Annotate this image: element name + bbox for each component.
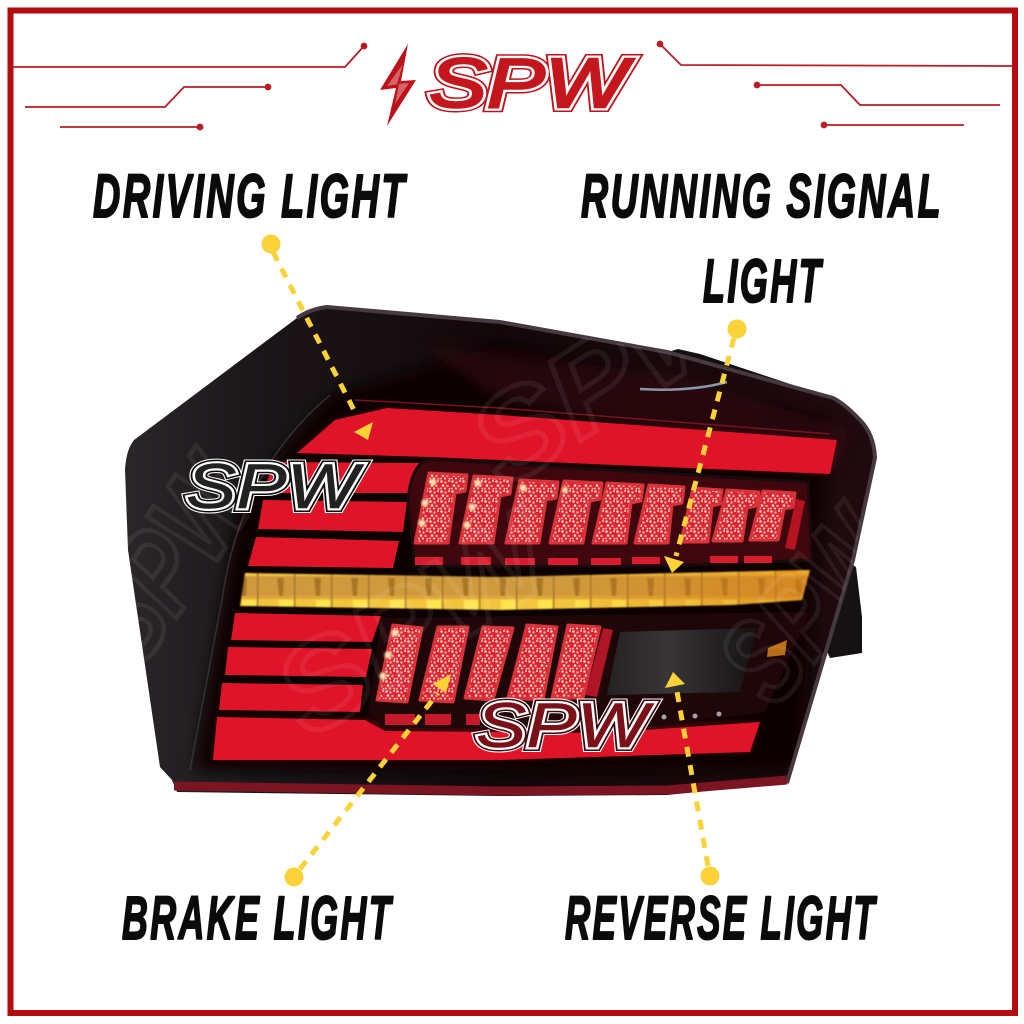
circuit lines: left bbox=[13, 43, 367, 130]
arrow: running signal light bbox=[664, 320, 746, 573]
thin upper red line bbox=[355, 400, 830, 434]
watermark logo: centre: SPW bbox=[476, 691, 655, 761]
label: running signal light: LIGHT bbox=[703, 247, 823, 315]
running signal amber bar bbox=[240, 570, 810, 610]
faint watermarks: SPW bbox=[251, 481, 584, 762]
thin brake segment bbox=[585, 628, 613, 697]
connector housing at the rear bbox=[822, 560, 862, 658]
logo wordmark SPW: SPW bbox=[429, 44, 634, 122]
driving light bars: upper left bbox=[248, 462, 420, 568]
upper LED modules bbox=[415, 473, 795, 543]
ribbed upper rim bbox=[297, 307, 875, 783]
driving light bars: lower left bbox=[213, 613, 760, 760]
brand logo bbox=[380, 44, 634, 126]
logo wordmark SPW: SPW bbox=[429, 44, 634, 122]
watermark logo: centre: SPW bbox=[476, 691, 655, 761]
faint watermarks: SPW bbox=[52, 431, 286, 685]
arrow: reverse light bbox=[665, 672, 720, 886]
reverse light block bbox=[607, 628, 757, 695]
label: brake light: BRAKE LIGHT bbox=[122, 884, 393, 952]
icon: lightning bolt bbox=[380, 44, 416, 126]
lens body bbox=[125, 307, 875, 796]
lower red rim bbox=[174, 780, 787, 791]
faint watermarks bbox=[128, 338, 861, 870]
brake hot spots bbox=[380, 630, 398, 680]
label: driving light: DRIVING LIGHT bbox=[93, 162, 407, 230]
LED hot spots bbox=[418, 478, 568, 528]
amber side reflector bbox=[767, 640, 787, 657]
circuit lines: right bbox=[657, 41, 1012, 128]
watermark logo: left: SPW bbox=[186, 452, 365, 522]
driving light bar: top bbox=[297, 408, 837, 474]
arrow: brake light bbox=[284, 674, 451, 886]
faint watermarks: SPW bbox=[692, 482, 928, 727]
lower small red strips bbox=[385, 714, 480, 725]
thin end segment bbox=[785, 499, 805, 550]
brake LED modules bbox=[377, 625, 600, 702]
lower LED cluster housing bbox=[368, 612, 810, 728]
red glow under bars bbox=[213, 408, 837, 760]
dark inner lens and tint bbox=[195, 345, 850, 770]
watermark logo: centre: SPW bbox=[476, 691, 655, 761]
upper LED cluster housing bbox=[408, 459, 812, 566]
arrow: driving light bbox=[262, 234, 373, 440]
watermark logo: left: SPW bbox=[186, 452, 365, 522]
top clip bbox=[668, 349, 843, 420]
reverse light bulbs bbox=[662, 712, 722, 720]
tail light assembly bbox=[125, 305, 877, 796]
watermark logo: left: SPW bbox=[186, 452, 365, 522]
label: running signal light bbox=[581, 162, 943, 315]
inner lens edge bbox=[190, 395, 330, 770]
watermark logo: left: SPW bbox=[186, 452, 365, 522]
upper small red strips bbox=[415, 556, 772, 565]
reflection streak bbox=[640, 382, 727, 390]
faint watermarks: SPW bbox=[446, 231, 779, 512]
logo wordmark SPW: SPW bbox=[429, 44, 634, 122]
watermark logo: centre: SPW bbox=[476, 691, 655, 761]
